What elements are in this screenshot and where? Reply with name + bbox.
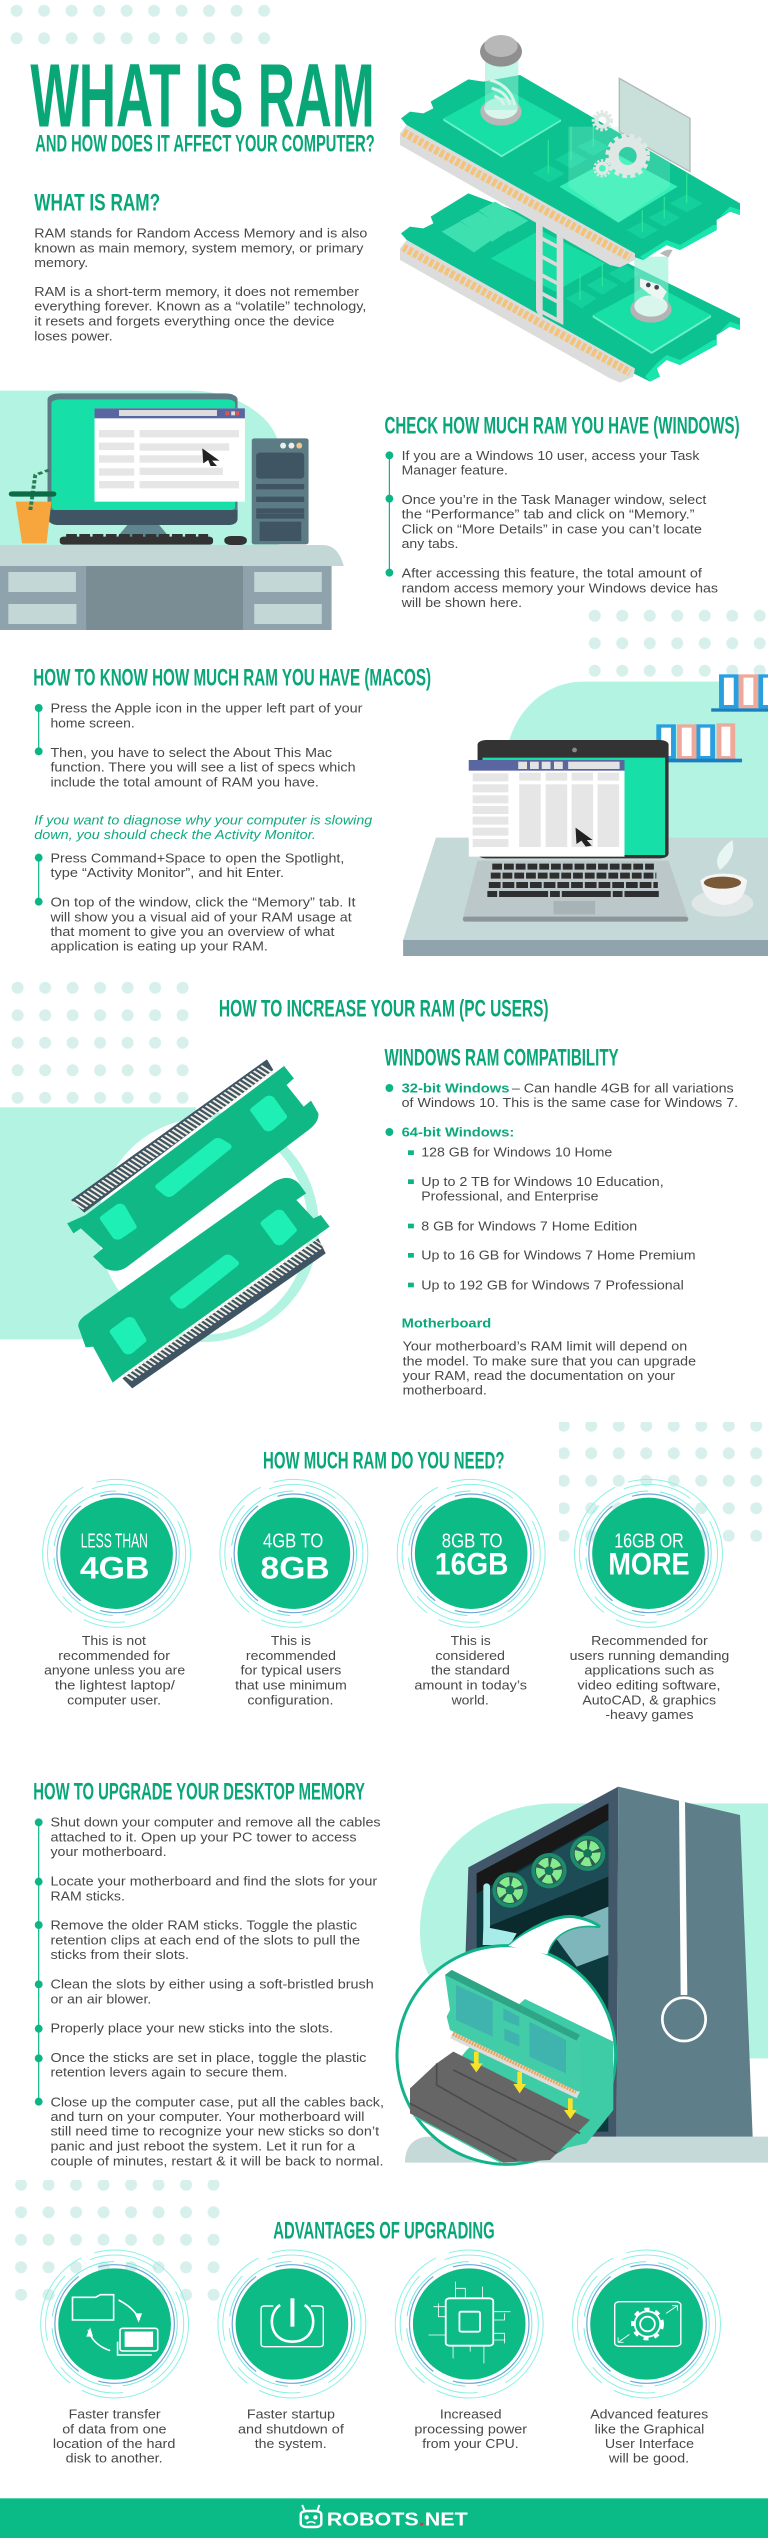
card: 16GB or more: MORE: [608, 1546, 690, 1581]
section: advantages of upgrading: [0, 2218, 768, 2538]
bullet list: activity monitor steps: that moment to give you an overview of what: [50, 924, 335, 939]
card: 16GB or more: video editing software,: [577, 1677, 720, 1693]
text block: short-term memory: [34, 284, 366, 344]
icon: file transfer: [72, 2295, 158, 2355]
card: 4GB to 8GB: recommended: [246, 1648, 336, 1663]
bullet list: activity monitor steps: Press Command+Space to open the Spotlight,: [50, 850, 344, 866]
bullet list: Windows steps: any tabs.: [402, 536, 458, 551]
lower board: [400, 193, 740, 383]
bullet list: activity monitor steps: type “Activity Monitor”, and hit Enter.: [50, 865, 284, 880]
illustration: two RAM sticks: [0, 1059, 330, 1388]
text block: motherboard limit: motherboard.: [403, 1383, 487, 1398]
floor: [405, 2137, 768, 2163]
text block: RAM definition: RAM stands for Random Access Memory and is also: [34, 225, 367, 241]
callout: activity monitor note: If you want to diagnose why your computer is slowing: [34, 812, 373, 828]
text block: motherboard limit: your RAM, read the documentation on your: [403, 1368, 675, 1383]
illustration: isometric RAM boards: [400, 35, 740, 383]
card: processing power: Increased: [440, 2407, 502, 2422]
tower front: [617, 1787, 753, 2137]
footer: [0, 2498, 768, 2538]
bullet list: macOS steps: function. There you will see a list of specs which: [50, 760, 356, 775]
callout: RAM insertion: [397, 1917, 616, 2164]
bullet list: upgrade steps: Clean the slots by either using a soft-bristled brush: [50, 1977, 374, 1992]
section: how much RAM: [43, 1448, 729, 1722]
list: Windows versions: [385, 1080, 738, 1293]
card: processing power: processing power: [414, 2421, 527, 2437]
section: what is RAM: [30, 46, 375, 344]
card: less than 4GB: 4GB: [80, 1550, 149, 1585]
bullet list: upgrade steps: Remove the older RAM sticks. Toggle the plastic: [50, 1918, 357, 1933]
bullet list: upgrade steps: Properly place your new sticks into the slots.: [50, 2021, 333, 2036]
list: Windows versions: 64-bit Windows:: [402, 1124, 514, 1140]
card: 4GB to 8GB: configuration.: [247, 1692, 334, 1708]
card: 8GB to 16GB: [397, 1479, 545, 1708]
card: 16GB or more: AutoCAD, & graphics: [582, 1692, 716, 1708]
bullet list: upgrade steps: Once the sticks are set in place, toggle the plastic: [50, 2050, 366, 2065]
text block: short-term memory: RAM is a short-term memory, it does not remember: [34, 284, 359, 299]
card: 16GB or more: applications such as: [584, 1663, 714, 1678]
bullet list: upgrade steps: still need time to recognize your new sticks so don’t: [50, 2124, 379, 2139]
card: faster startup: [218, 2250, 366, 2451]
card: 8GB to 16GB: This is: [451, 1633, 491, 1648]
card: 4GB to 8GB: 8GB: [261, 1550, 330, 1585]
bullet list: upgrade steps: or an air blower.: [50, 1991, 151, 2007]
icon: robot logo: [301, 2505, 321, 2527]
icon: cooling fans: [492, 1836, 605, 1908]
card: faster transfer: of data from one: [62, 2421, 167, 2437]
icon: CPU chip: [429, 2282, 510, 2363]
bullet timeline: [385, 451, 393, 577]
bullet list: macOS steps: include the total amount of RAM you have.: [50, 774, 319, 790]
card: 16GB or more: -heavy games: [605, 1707, 694, 1722]
card: less than 4GB: This is not: [82, 1633, 146, 1648]
icon: gears: [593, 111, 648, 176]
icon: gear in screen: [615, 2302, 681, 2346]
card: 8GB to 16GB: considered: [435, 1648, 505, 1663]
text block: motherboard limit: [403, 1339, 696, 1398]
illustration: PC tower with RAM callout: [397, 1787, 768, 2164]
callout: activity monitor note: down, you should check the Activity Monitor.: [34, 827, 316, 842]
card: advanced features: like the Graphical: [595, 2421, 704, 2437]
card: faster transfer: Faster transfer: [69, 2407, 161, 2422]
card: 4GB to 8GB: that use minimum: [235, 1677, 347, 1693]
card: faster transfer: disk to another.: [66, 2451, 163, 2466]
card: 4GB to 8GB: for typical users: [240, 1663, 341, 1678]
card: 16GB or more: [570, 1479, 729, 1722]
list: Windows versions: Up to 2 TB for Windows 10 Education,: [421, 1174, 664, 1189]
tower side: [465, 1787, 618, 2137]
card: 4GB to 8GB: This is: [271, 1633, 311, 1648]
card: 16GB or more: 16GB OR: [614, 1530, 684, 1552]
card: 8GB to 16GB: 8GB TO: [442, 1530, 503, 1552]
bullet timeline: [35, 1818, 43, 2106]
card: faster startup: the system.: [255, 2436, 327, 2451]
section: increase RAM on PC: [0, 996, 738, 1398]
card: faster startup: and shutdown of: [238, 2421, 344, 2437]
bullet list: upgrade steps: sticks from their slots.: [50, 1947, 189, 1962]
card: 8GB to 16GB: the standard: [431, 1663, 510, 1678]
bullet list: upgrade steps: retention levers again to secure them.: [50, 2065, 288, 2080]
bullet list: upgrade steps: Locate your motherboard and find the slots for your: [50, 1874, 378, 1889]
bullet list: macOS steps: home screen.: [50, 715, 135, 731]
text block: RAM definition: known as main memory, system memory, or primary: [34, 240, 364, 256]
panel: glass screen: [619, 78, 690, 172]
card: less than 4GB: LESS THAN: [81, 1530, 148, 1552]
text block: short-term memory: everything forever. Known as a “volatile” technology,: [34, 299, 366, 314]
bullet list: macOS steps: Press the Apple icon in the upper left part of your: [50, 701, 363, 716]
bullet list: activity monitor steps: will show you a visual aid of your RAM usage at: [50, 909, 352, 925]
bullet list: upgrade steps: couple of minutes, restart & it will be back to normal.: [50, 2153, 384, 2169]
card: advanced features: [573, 2250, 720, 2466]
bullet list: activity monitor steps: [50, 850, 356, 954]
bullet list: macOS steps: Then, you have to select the About This Mac: [50, 745, 332, 760]
text block: short-term memory: it resets and forgets everything once the device: [34, 314, 335, 329]
bullet list: upgrade steps: and turn on your computer. Your motherboard will: [50, 2109, 364, 2124]
callout: activity monitor note: [34, 812, 373, 842]
icon: glass tube with wifi: [480, 35, 522, 126]
bullet list: activity monitor steps: On top of the window, click the “Memory” tab. It: [50, 895, 356, 910]
text block: short-term memory: loses power.: [34, 328, 113, 344]
bullet list: Windows steps: [401, 448, 718, 610]
logo wordmark: ROBOTS.NET: [327, 2509, 468, 2530]
illustration: laptop on desk: [403, 676, 768, 956]
bullet list: upgrade steps: Close up the computer case, put all the cables back,: [50, 2094, 384, 2110]
upper board: [400, 75, 740, 267]
text block: RAM definition: memory.: [34, 255, 88, 270]
illustration: desktop computer on desk: [0, 391, 344, 630]
bullet list: Windows steps: Manager feature.: [402, 463, 508, 478]
icon: ladder: [536, 223, 563, 325]
bullet list: Windows steps: will be shown here.: [401, 595, 522, 610]
list: Windows versions: 128 GB for Windows 10 Home: [421, 1145, 612, 1160]
bullet list: upgrade steps: RAM sticks.: [50, 1888, 125, 1904]
bullet timeline: [35, 704, 43, 906]
card: 4GB to 8GB: 4GB TO: [263, 1530, 323, 1552]
card: less than 4GB: computer user.: [67, 1692, 161, 1708]
card: less than 4GB: [43, 1479, 191, 1708]
lower glass tube: [630, 250, 673, 323]
bullet list: upgrade steps: Shut down your computer and remove all the cables: [50, 1815, 381, 1830]
card: 8GB to 16GB: amount in today’s: [414, 1677, 527, 1693]
section: upgrade desktop memory: [33, 1779, 384, 2169]
bullet list: upgrade steps: retention clips at each end of the slots to pull the: [50, 1932, 360, 1948]
text block: RAM definition: [34, 225, 367, 270]
mint backdrop: [420, 1803, 768, 2058]
card: less than 4GB: the lightest laptop/: [55, 1677, 175, 1693]
list: Windows versions: 8 GB for Windows 7 Home Edition: [421, 1218, 637, 1234]
bullet list: upgrade steps: attached to it. Open up your PC tower to access: [50, 1829, 357, 1845]
card: faster startup: Faster startup: [247, 2407, 335, 2422]
bullet list: upgrade steps: [50, 1815, 384, 2169]
card: faster transfer: location of the hard: [53, 2436, 175, 2451]
card: processing power: [395, 2250, 543, 2451]
bullet list: upgrade steps: your motherboard.: [50, 1844, 167, 1859]
card: advanced features: will be good.: [608, 2451, 689, 2466]
bullet list: upgrade steps: panic and just reboot the system. Let it run for a: [50, 2139, 356, 2154]
card: less than 4GB: recommended for: [58, 1648, 170, 1663]
section: check RAM on macOS: [33, 665, 768, 956]
bullet list: activity monitor steps: application is eating up your RAM.: [50, 939, 268, 954]
card: advanced features: User Interface: [605, 2436, 694, 2451]
icon: power button: [261, 2298, 323, 2347]
card: processing power: from your CPU.: [422, 2436, 519, 2451]
card: advanced features: Advanced features: [590, 2407, 708, 2422]
card: less than 4GB: anyone unless you are: [44, 1663, 185, 1678]
subheading: motherboard: Motherboard: [402, 1315, 491, 1331]
card: 8GB to 16GB: world.: [451, 1692, 489, 1708]
list: Windows versions: Professional, and Enterprise: [421, 1189, 599, 1204]
card: 8GB to 16GB: 16GB: [435, 1546, 508, 1581]
list: Windows versions: 32-bit Windows: [402, 1080, 509, 1096]
card: 16GB or more: Recommended for: [591, 1633, 708, 1648]
card: faster transfer: [41, 2250, 189, 2466]
section: what is RAM: WHAT IS RAM?: [34, 190, 160, 216]
section: check RAM on Windows: [0, 391, 740, 630]
bullet list: macOS steps: [50, 701, 363, 790]
card: 4GB to 8GB: [220, 1479, 368, 1708]
